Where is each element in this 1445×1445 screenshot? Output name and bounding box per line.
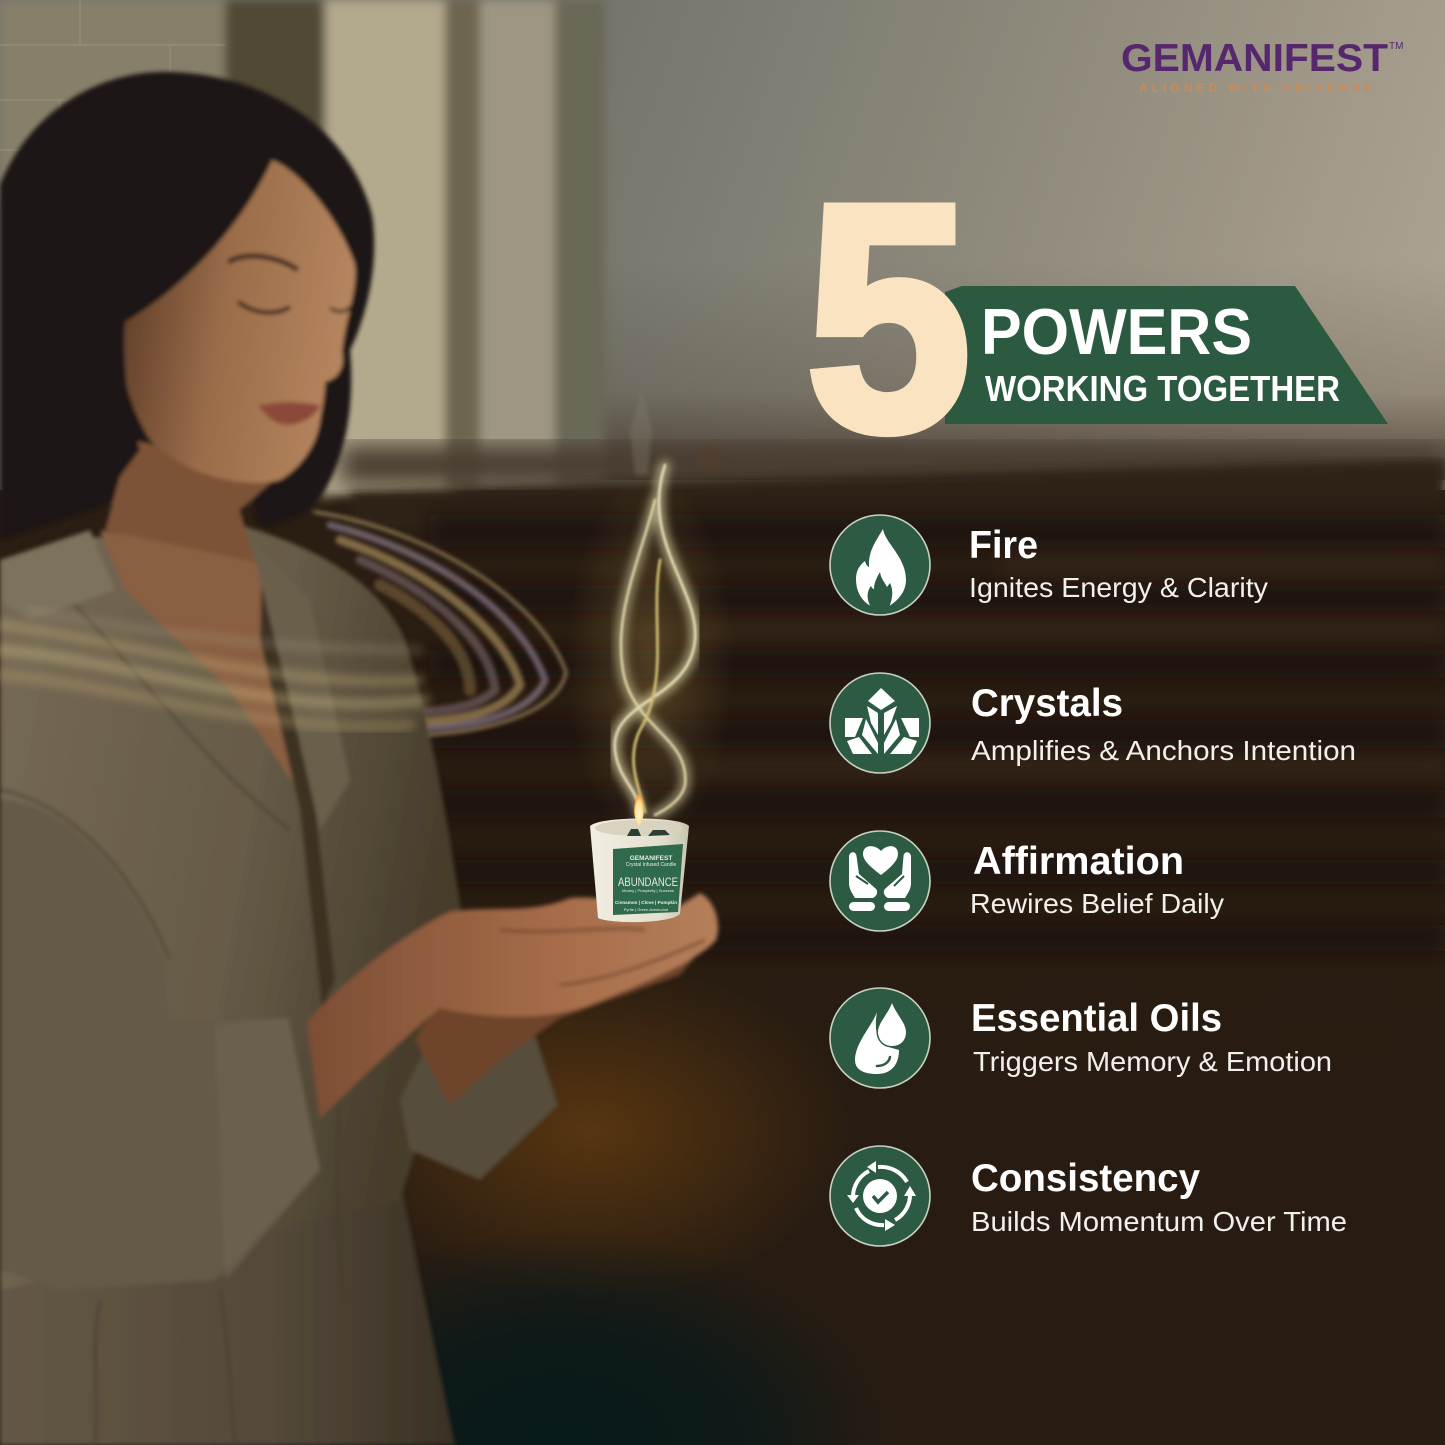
label text	[615, 855, 678, 912]
item: crystals	[830, 673, 1356, 773]
item: affirmation	[830, 831, 1224, 931]
smoke swirl	[565, 465, 735, 850]
dark teal floor shadow	[220, 1210, 900, 1445]
candle glass	[590, 818, 689, 922]
label: fire: Fire	[969, 524, 1038, 567]
fingers lines	[500, 929, 705, 985]
icon: cycle with check	[830, 1146, 930, 1246]
skirt / lower shirt	[0, 1000, 455, 1445]
icon: hands and heart	[830, 831, 930, 931]
second eye	[330, 306, 352, 312]
green banner	[945, 286, 1388, 424]
description: crystals: Amplifies & Anchors Intention	[971, 735, 1356, 766]
lower hand	[415, 945, 705, 1105]
description: essential oils: Triggers Memory & Emotion	[973, 1046, 1332, 1077]
label text: Money | Prosperity | Success	[622, 888, 674, 893]
eye	[238, 302, 290, 313]
icon: oil drops	[830, 988, 930, 1088]
hair back	[0, 72, 374, 540]
shirt folds	[0, 600, 345, 1442]
wall shadow fade above ledge	[560, 260, 1445, 480]
vase on ledge	[630, 390, 723, 475]
face	[121, 160, 355, 483]
label text: ABUNDANCE	[618, 875, 678, 889]
chest skin	[100, 530, 305, 800]
woman	[0, 72, 718, 1445]
wisps behind body	[315, 512, 566, 735]
label text: GEMANIFEST	[630, 855, 672, 862]
flame	[634, 792, 644, 826]
label: crystals: Crystals	[971, 682, 1123, 725]
heading	[806, 139, 1388, 498]
shirt opening shadow	[260, 560, 335, 1010]
powers: POWERS	[981, 295, 1252, 368]
window and pillars	[0, 0, 605, 500]
working together: WORKING TOGETHER	[985, 368, 1340, 409]
orange floor glow	[330, 960, 850, 1300]
trademark: TM	[1389, 41, 1403, 52]
icon: crystals	[830, 673, 930, 773]
hair front strand	[20, 160, 272, 510]
bricks	[0, 0, 225, 150]
item: consistency	[830, 1146, 1347, 1246]
label text: Pyrite | Green Aventurine	[624, 907, 669, 912]
label	[613, 844, 683, 915]
description: fire: Ignites Energy & Clarity	[969, 572, 1268, 603]
item: essential oils	[830, 988, 1332, 1088]
halo	[565, 470, 735, 850]
candle	[590, 792, 689, 922]
forearm and hand	[307, 893, 718, 1118]
description: affirmation: Rewires Belief Daily	[970, 888, 1224, 919]
item: fire	[830, 515, 1268, 615]
lips	[258, 402, 320, 425]
logo	[1121, 37, 1403, 95]
description: consistency: Builds Momentum Over Time	[971, 1206, 1347, 1237]
icon: flame	[830, 515, 930, 615]
logo wordmark: GEMANIFEST	[1121, 37, 1388, 80]
collar	[0, 530, 115, 620]
wisps across body	[0, 610, 425, 726]
label text: Crystal Infused Candle	[626, 862, 677, 868]
ledge	[340, 445, 1445, 485]
back arm and cuff	[400, 1020, 558, 1180]
neck	[105, 440, 285, 562]
label: affirmation: Affirmation	[973, 840, 1184, 883]
crystals	[627, 829, 670, 836]
sleeve	[0, 800, 320, 1290]
big number 5: 5	[806, 139, 971, 498]
label: consistency: Consistency	[971, 1157, 1200, 1200]
candle wax top	[595, 820, 683, 836]
tagline: ALIGNED WITH UNIVERSE	[1139, 81, 1372, 95]
wood slats	[430, 515, 1445, 951]
wall	[0, 0, 1445, 490]
label: essential oils: Essential Oils	[971, 997, 1222, 1040]
torso shirt	[0, 525, 462, 1290]
label text: Cinnamon | Clove | Pumpkin	[615, 900, 677, 905]
